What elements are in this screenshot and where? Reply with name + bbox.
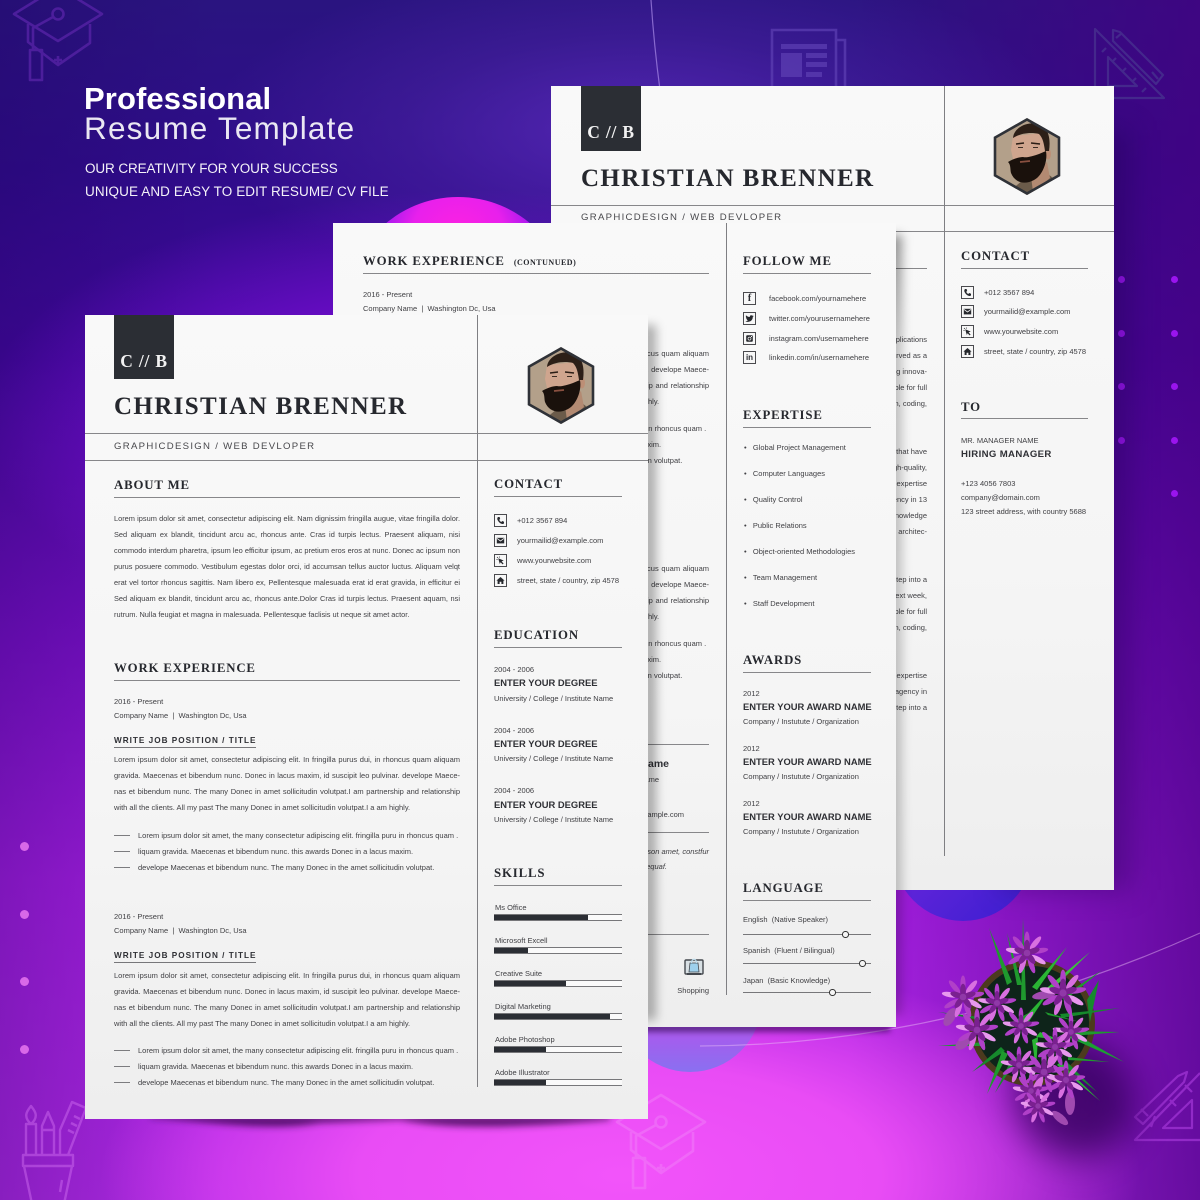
skill: Adobe Illustrator <box>494 1068 622 1086</box>
text fragment block two: agency in 13 <box>884 495 927 504</box>
work experience continued heading: WORK EXPERIENCE (CONTUNUED) <box>363 254 576 268</box>
award organisation three: Company / Instutute / Organization <box>743 827 859 836</box>
paper shadow: middle resume right edge <box>884 235 902 1015</box>
text fragment block four <box>865 671 928 712</box>
contact icon: mail <box>961 305 974 318</box>
slider knob: Spanish <box>859 960 866 966</box>
skill: Digital Marketing <box>494 1002 622 1020</box>
contact heading: CONTACT <box>494 477 563 491</box>
portrait hexagon <box>528 347 594 424</box>
left column underline remnant <box>581 268 927 269</box>
recipient phone: +123 4056 7803 <box>961 479 1015 488</box>
heading: Resume Template: Resume Template <box>84 110 355 146</box>
degree one: ENTER YOUR DEGREE <box>494 677 598 688</box>
text fragment block two: architec- <box>898 527 927 536</box>
social icon: linkedin: in <box>746 353 753 362</box>
text fragment block one: have served as a <box>870 351 927 360</box>
job one paragraph: nas et bibendum nunc. The many Donec in amet sollicitudin volutpat.I am partnership and relationship <box>114 787 460 796</box>
heading: Professional: Professional <box>84 81 271 116</box>
social icon: instagram <box>743 332 756 345</box>
paper shadow: middle resume bottom edge <box>640 1024 890 1032</box>
job two paragraph: Lorem ipsum dolor sit amet, consectetur adipiscing elit. In fringilla purus dui, in rhoncus quam aliquam <box>114 971 460 980</box>
experience bullets one <box>386 424 706 465</box>
job two title <box>114 952 256 963</box>
to section <box>961 400 1088 516</box>
date line: 2016 - Present <box>363 290 412 299</box>
expertise heading: EXPERTISE <box>743 408 823 422</box>
icon: ruler and pencil bottom right <box>1134 1071 1200 1142</box>
text fragment block three <box>866 575 928 632</box>
expertise list <box>744 443 855 608</box>
experience paragraph one <box>363 349 709 406</box>
job one paragraph: Lorem ipsum dolor sit amet, consectetur adipiscing elit. In fringilla purus dui, in rhoncus quam aliquam <box>114 755 460 764</box>
experience bullets one: Lorem ipsum dolor sit amet, the many consectetur adipiscing elit. fringilla puru in rhoncus quam . <box>386 424 706 433</box>
slider knob: Japan <box>829 989 836 996</box>
about me paragraph: erat vel tortor rhoncus sagittis. Nam libero ex, Pellentesque malesuada erat id erat gravida, in efficitur ei <box>114 578 460 587</box>
icon: shopping <box>684 958 704 975</box>
school one: University / College / Institute Name <box>494 694 613 702</box>
skill: Digital Marketing: Digital Marketing <box>495 1002 551 1011</box>
about me paragraph: rutrum. Nulla feugiat et magna in malesuada. Pellentesque faclisis ut neque sit amet actor. <box>114 610 409 619</box>
text fragment block two <box>865 447 927 536</box>
about me paragraph <box>114 514 460 619</box>
experience paragraph one: nas et bibendum nunc. The many Donec in amet sollicitudin volutpat.I am partnership and relationship <box>363 381 709 390</box>
contact section <box>961 249 1088 358</box>
text fragment block two: projects that have <box>868 447 927 456</box>
skill: Ms Office <box>494 903 622 921</box>
job subtitle: GRAPHICDESIGN / WEB DEVLOPER <box>114 441 315 452</box>
education dates one: 2004 - 2006 <box>494 665 534 674</box>
icon: set square and pencil top right <box>1094 28 1165 99</box>
job two paragraph: nas et bibendum nunc. The many Donec in amet sollicitudin volutpat.I am partnership and relationship <box>114 1003 460 1012</box>
tagline first line: OUR CREATIVITY FOR YOUR SUCCESS <box>85 161 338 176</box>
text fragment block two: and knowledge <box>877 511 927 520</box>
text fragment block four: technical expertise <box>865 671 927 680</box>
text fragment block one: web applications <box>872 335 927 344</box>
italic note: Lorem ipsum dolor sit amet, person amet, constfur <box>542 847 709 856</box>
logo block: C // B <box>120 351 168 371</box>
job one bullets <box>138 831 458 872</box>
expertise list: • Staff Development <box>744 599 814 608</box>
dots: right column pattern <box>1118 276 1178 497</box>
job one paragraph <box>114 755 460 812</box>
recipient title: HIRING MANAGER <box>961 449 1052 460</box>
job two bullets <box>138 1046 458 1087</box>
job two paragraph: gravida. Maecenas et bibendum nunc. Donec in lacus maxim, id suscipit leo pulvinar. develope Maece- <box>114 987 460 996</box>
skills heading: SKILLS <box>494 866 545 880</box>
job two bullets: Lorem ipsum dolor sit amet, the many consectetur adipiscing elit. fringilla puru in rhoncus quam . <box>138 1046 458 1055</box>
recipient address: 123 street address, with country 5688 <box>961 507 1086 516</box>
paper shadow: back resume <box>1000 130 1130 890</box>
skill: Microsoft Excell: Microsoft Excell <box>495 936 548 945</box>
job one date: 2016 - Present <box>114 697 163 706</box>
job one paragraph: with all the clients. All my past The many Donec in amet sollicitudin volutpat.I a am highly. <box>114 803 410 812</box>
contact website text: www.yourwebsite.com <box>984 327 1058 336</box>
tagline second line: UNIQUE AND EASY TO EDIT RESUME/ CV FILE <box>85 184 389 199</box>
skill: Microsoft Excell <box>494 936 622 954</box>
facebook url: facebook.com/yournamehere <box>769 294 866 303</box>
social icon: facebook: f <box>748 293 751 304</box>
twitter url: twitter.com/yourusernamehere <box>769 314 870 323</box>
education dates three: 2004 - 2006 <box>494 786 534 795</box>
italic note second line: adipiscing consequaf. <box>595 862 667 871</box>
text fragment block three: responsible for full <box>866 607 927 616</box>
award year one: 2012 <box>743 689 760 698</box>
experience paragraph two: with all the clients. All my past The many Donec in amet sollicitudin volutpat.I a am highly. <box>363 612 659 621</box>
text fragment block three: design, coding, <box>877 623 927 632</box>
recipient email: company@domain.com <box>961 493 1040 502</box>
job one bullets: develope Maecenas et bibendum nunc. The many Donec in the amet sollicitudin volutpat. <box>138 863 434 872</box>
follow me heading: FOLLOW ME <box>743 254 832 268</box>
job one title: WRITE JOB POSITION / TITLE <box>114 736 256 745</box>
experience bullets two: develope Maecenas et bibendum nunc. The many Donec in the amet sollicitudin volutpat. <box>386 671 682 680</box>
panel: middle resume page <box>333 223 896 1027</box>
award name three: ENTER YOUR AWARD NAME <box>743 811 872 822</box>
name heading: CHRISTIAN BRENNER <box>114 393 407 420</box>
job two company: Company Name | Washington Dc, Usa <box>114 926 247 935</box>
contact website text: www.yourwebsite.com <box>517 556 591 565</box>
text fragment block one: responsible for full <box>866 383 927 392</box>
job one title <box>114 737 256 748</box>
skill: Ms Office: Ms Office <box>495 903 527 912</box>
icon: graduation cap bottom <box>616 1094 706 1190</box>
school two: University / College / Institute Name <box>494 754 613 763</box>
text fragment block one: design, coding, <box>877 399 927 408</box>
job two bullets: develope Maecenas et bibendum nunc. The many Donec in the amet sollicitudin volutpat. <box>138 1078 434 1087</box>
contact icon: website <box>961 325 974 338</box>
contact mail text: yourmailid@example.com <box>517 536 603 545</box>
shopping label: Shopping <box>677 986 709 995</box>
about me heading: ABOUT ME <box>114 478 190 492</box>
reference email: yourmail@example.com <box>603 810 684 819</box>
follow me section <box>743 254 871 364</box>
job two bullets: liquam gravida. Maecenas et bibendum nunc. this awards Donec in a lacus maxim. <box>138 1062 413 1071</box>
degree three: ENTER YOUR DEGREE <box>494 799 598 810</box>
expertise list: • Computer Languages <box>744 469 825 478</box>
text fragment block one <box>866 335 928 408</box>
contact icon: home <box>494 574 507 587</box>
job one bullets: liquam gravida. Maecenas et bibendum nunc. this awards Donec in a lacus maxim. <box>138 847 413 856</box>
skill: Adobe Photoshop: Adobe Photoshop <box>495 1035 555 1044</box>
award name one: ENTER YOUR AWARD NAME <box>743 701 872 712</box>
text fragment block two: technical expertise <box>865 479 927 488</box>
icon: newspaper <box>770 28 846 86</box>
experience bullets one: develope Maecenas et bibendum nunc. The many Donec in the amet sollicitudin volutpat. <box>386 456 682 465</box>
icon: pencil cup bottom left <box>22 1100 85 1200</box>
award year three: 2012 <box>743 799 760 808</box>
paper shadow: front resume bottom <box>148 1119 614 1132</box>
contact icon: phone <box>961 286 974 299</box>
contact icon: phone <box>494 514 507 527</box>
experience paragraph two: gravida. Maecenas et bibendum nunc. Donec in lacus maxim, id suscipit leo pulvinar. develope Maece- <box>363 580 709 589</box>
award organisation one: Company / Instutute / Organization <box>743 717 859 726</box>
job two paragraph: with all the clients. All my past The many Donec in amet sollicitudin volutpat.I a am highly. <box>114 1019 410 1028</box>
panel: front resume page <box>85 315 648 1119</box>
experience paragraph two: nas et bibendum nunc. The many Donec in amet sollicitudin volutpat.I am partnership and relationship <box>363 596 709 605</box>
panel: back resume page <box>551 86 1114 890</box>
job subtitle: GRAPHICDESIGN / WEB DEVLOPER <box>581 212 782 223</box>
contact icon: home <box>961 345 974 358</box>
about me paragraph: purus posuere commodo. Vestibulum egestas dolor orci, id accumsan tellus auctor luctus. Aliquam velqt <box>114 562 460 571</box>
text fragment block two: high-quality, <box>887 463 927 472</box>
text fragment block three: next week, <box>891 591 927 600</box>
contact heading: CONTACT <box>961 249 1030 263</box>
social icon: linkedin <box>743 351 756 364</box>
job one paragraph: gravida. Maecenas et bibendum nunc. Donec in lacus maxim, id suscipit leo pulvinar. develope Maece- <box>114 771 460 780</box>
to heading: TO <box>961 400 981 414</box>
job one bullets: Lorem ipsum dolor sit amet, the many consectetur adipiscing elit. fringilla puru in rhoncus quam . <box>138 831 458 840</box>
contact section <box>494 477 622 587</box>
contact icon: mail <box>494 534 507 547</box>
awards heading: AWARDS <box>743 653 802 667</box>
contact phone text: +012 3567 894 <box>517 516 567 525</box>
skill: Adobe Illustrator: Adobe Illustrator <box>495 1068 550 1077</box>
logo block: C // B <box>587 122 635 142</box>
icon: graduation cap top left <box>12 0 104 82</box>
award year two: 2012 <box>743 744 760 753</box>
degree two: ENTER YOUR DEGREE <box>494 738 598 749</box>
about me paragraph: Sed aliquam ex blandit, tincidunt arcu ac, rhoncus ante.Dolor Cras id turpis lectus. Praesent aquam, nsi <box>114 594 460 603</box>
job two title: WRITE JOB POSITION / TITLE <box>114 951 256 960</box>
instagram url: instagram.com/usernamehere <box>769 334 869 343</box>
name heading: CHRISTIAN BRENNER <box>581 165 874 192</box>
contact address text: street, state / country, zip 4578 <box>517 576 619 585</box>
school three: University / College / Institute Name <box>494 815 613 824</box>
about me paragraph: Lorem ipsum dolor sit amet, consectetur adipiscing elit. Nam dignissim fringilla augue, vitae fringilla dolor. <box>114 514 460 523</box>
text fragment block one: leading innova- <box>876 367 927 376</box>
contact mail text: yourmailid@example.com <box>984 307 1070 316</box>
social icon: twitter <box>743 312 756 325</box>
language label: Spanish: Spanish (Fluent / Bilingual) <box>743 946 835 955</box>
social icon: facebook <box>743 292 756 305</box>
skill: Creative Suite: Creative Suite <box>495 969 542 978</box>
expertise list: • Object-oriented Methodologies <box>744 547 855 556</box>
experience bullets two <box>386 639 706 680</box>
logo block <box>581 86 641 151</box>
text fragment block three: step into a <box>892 575 927 584</box>
skill: Creative Suite <box>494 969 622 987</box>
language label: English: English (Native Speaker) <box>743 915 828 924</box>
job two paragraph <box>114 971 460 1028</box>
expertise list: • Global Project Management <box>744 443 846 452</box>
job one company: Company Name | Washington Dc, Usa <box>114 711 247 720</box>
experience paragraph two <box>363 564 709 621</box>
paper shadow: front resume right edge <box>642 325 656 1020</box>
expertise list: • Team Management <box>744 573 817 582</box>
linkedin url: linkedin.com/in/usernamehere <box>769 353 869 362</box>
about me paragraph: commodo interdum pharetra, ipsum leo efficitur ipsum, ac pretium eros eros at nunc. Donec ac ipsum non <box>114 546 460 555</box>
education heading: EDUCATION <box>494 628 579 642</box>
text fragment block four: step into a <box>892 703 927 712</box>
language heading: LANGUAGE <box>743 881 824 895</box>
award name two: ENTER YOUR AWARD NAME <box>743 756 872 767</box>
expertise list: • Public Relations <box>744 521 807 530</box>
recipient name: MR. MANAGER NAME <box>961 436 1039 445</box>
education section <box>494 628 622 824</box>
experience paragraph one: gravida. Maecenas et bibendum nunc. Donec in lacus maxim, id suscipit leo pulvinar. develope Maece- <box>363 365 709 374</box>
about me paragraph: Sed aliquam ex blandit, tincidunt arcu ac, rhoncus ante. Cras id turpis lectus. Praesent aliquam, nisi <box>114 530 460 539</box>
experience paragraph one: with all the clients. All my past The many Donec in amet sollicitudin volutpat.I a am highly. <box>363 397 659 406</box>
contact icon: website <box>494 554 507 567</box>
skill: Adobe Photoshop <box>494 1035 622 1053</box>
education dates two: 2004 - 2006 <box>494 726 534 734</box>
experience bullets one: liquam gravida. Maecenas et bibendum nunc. this awards Donec in a lacus maxim. <box>386 440 661 449</box>
plant in pot <box>925 910 1135 1130</box>
text fragment block four: agency in <box>895 687 927 696</box>
logo block <box>114 315 174 379</box>
experience paragraph one: Lorem ipsum dolor sit amet, consectetur adipiscing elit. In fringilla purus dui, in rhoncus quam aliquam <box>363 349 709 358</box>
experience bullets two: liquam gravida. Maecenas et bibendum nunc. this awards Donec in a lacus maxim. <box>386 655 661 664</box>
contact phone text: +012 3567 894 <box>984 288 1034 297</box>
plant shadow <box>990 1013 1159 1182</box>
contact address text: street, state / country, zip 4578 <box>984 347 1086 356</box>
experience bullets two: Lorem ipsum dolor sit amet, the many consectetur adipiscing elit. fringilla puru in rhoncus quam . <box>386 639 706 648</box>
job two date: 2016 - Present <box>114 912 163 921</box>
expertise section <box>743 408 871 608</box>
reference company: Company Name <box>605 775 659 784</box>
awards section <box>743 653 872 836</box>
work experience heading: WORK EXPERIENCE <box>114 661 256 675</box>
expertise list: • Quality Control <box>744 495 802 504</box>
slider knob: English <box>842 931 848 938</box>
portrait hexagon <box>994 118 1060 195</box>
award organisation two: Company / Instutute / Organization <box>743 772 859 781</box>
title block <box>84 81 389 199</box>
experience paragraph two: Lorem ipsum dolor sit amet, consectetur adipiscing elit. In fringilla purus dui, in rhoncus quam aliquam <box>363 564 709 573</box>
language label: Japan: Japan (Basic Knowledge) <box>743 976 830 985</box>
reference name: Reference Name <box>587 758 669 770</box>
dots: left column pattern <box>20 842 29 1054</box>
company line: Company Name | Washington Dc, Usa <box>363 304 496 313</box>
